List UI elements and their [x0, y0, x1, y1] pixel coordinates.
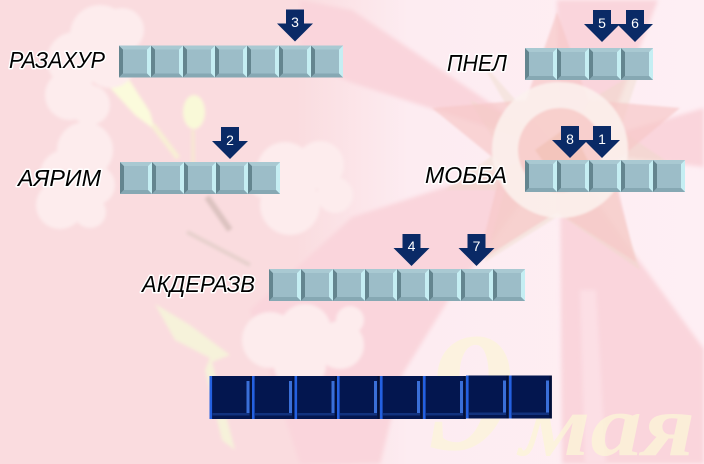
arrow 4: 4 [408, 238, 416, 254]
carnations [36, 5, 364, 450]
word row: ПНЕЛ [447, 48, 653, 80]
arrow 6: 6 [631, 15, 639, 31]
arrow 3: 3 [291, 14, 299, 30]
arrow 8 [552, 126, 588, 158]
word row: РАЗАХУР: РАЗАХУР [9, 47, 106, 73]
word row: МОББА [425, 160, 685, 192]
word row: ПНЕЛ: ПНЕЛ [447, 50, 507, 76]
word row: МОББА: МОББА [425, 162, 507, 188]
arrow 6 [617, 10, 653, 42]
word row: АЯРИМ: АЯРИМ [16, 165, 102, 191]
arrow 1 [584, 126, 620, 158]
arrow 5: 5 [598, 15, 606, 31]
arrow 2: 2 [226, 132, 234, 148]
answer row [210, 376, 552, 419]
arrow 7 [458, 234, 494, 266]
word row: АЯРИМ [16, 162, 280, 194]
arrow 4 [394, 234, 430, 266]
arrow 1: 1 [598, 131, 606, 147]
sunburst rays [250, 0, 704, 464]
arrow 5 [584, 10, 620, 42]
numeral and month [428, 298, 695, 464]
word row: АКДЕРАЗВ [140, 269, 525, 301]
arrow 7: 7 [473, 238, 481, 254]
word row: АКДЕРАЗВ: АКДЕРАЗВ [140, 271, 255, 297]
arrow 2 [212, 127, 248, 159]
order star [432, 12, 680, 270]
arrow 3 [277, 10, 313, 42]
word row: РАЗАХУР [9, 46, 343, 78]
arrow 8: 8 [566, 131, 574, 147]
